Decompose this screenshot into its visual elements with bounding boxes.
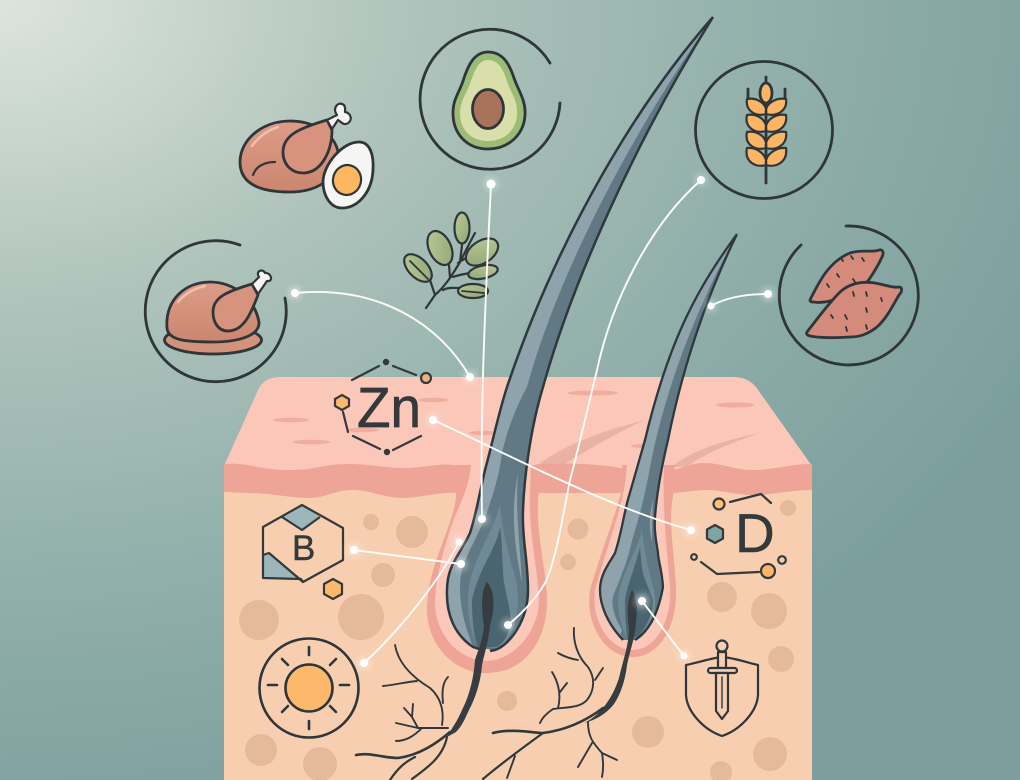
panel: skin cross-section xyxy=(224,377,812,780)
dermis layer xyxy=(224,466,812,780)
icon: turkey in circle xyxy=(145,241,286,382)
connector dots xyxy=(291,176,772,667)
icon: zinc molecule xyxy=(335,359,431,455)
icon: shield and sword xyxy=(686,640,758,736)
orange hexagon xyxy=(324,579,342,599)
hair root core xyxy=(447,582,493,737)
hair strand: large xyxy=(356,17,713,780)
dermal spots xyxy=(239,500,796,780)
hexagon shading xyxy=(282,505,320,530)
small hair shaft and bulb xyxy=(600,234,737,640)
outline xyxy=(447,17,713,651)
connector glow halos xyxy=(290,176,773,668)
small hair root core xyxy=(584,590,637,723)
B symbol: B xyxy=(292,529,315,568)
bulb mid-tone xyxy=(468,505,518,648)
hair shadows on skin xyxy=(522,420,760,478)
icon: vitamin B hexagon xyxy=(263,505,343,599)
hair shaft and bulb xyxy=(447,17,713,650)
pink dermal band xyxy=(224,463,812,498)
follicle sheath: small xyxy=(589,462,676,657)
shaft highlight xyxy=(447,17,713,647)
icon: vitamin D molecule xyxy=(691,494,786,578)
small bulb mid-tone xyxy=(618,530,655,638)
Zn symbol: Zn xyxy=(357,376,421,440)
icon: herb sprig xyxy=(399,212,503,308)
root branches xyxy=(356,645,450,780)
outline xyxy=(600,234,737,640)
icon: turkey and egg xyxy=(240,104,373,208)
follicle sheath: large xyxy=(427,462,547,673)
small shaft highlight xyxy=(600,234,737,636)
icon: sun vitamin D xyxy=(260,638,358,738)
small side highlight xyxy=(650,500,653,542)
side highlight xyxy=(514,473,522,583)
icon: avocado in circle xyxy=(420,29,560,169)
connector lines xyxy=(295,180,768,663)
icon: wheat in circle xyxy=(696,62,832,198)
small bulb dark interior xyxy=(625,547,653,638)
hair strand: small xyxy=(483,234,737,779)
small root branches xyxy=(483,628,617,779)
D symbol: D xyxy=(735,502,775,564)
epidermis top surface xyxy=(224,377,812,780)
bulb dark interior xyxy=(472,527,510,648)
surface marks xyxy=(273,390,754,448)
icon: sweet potato in circle xyxy=(779,226,918,365)
